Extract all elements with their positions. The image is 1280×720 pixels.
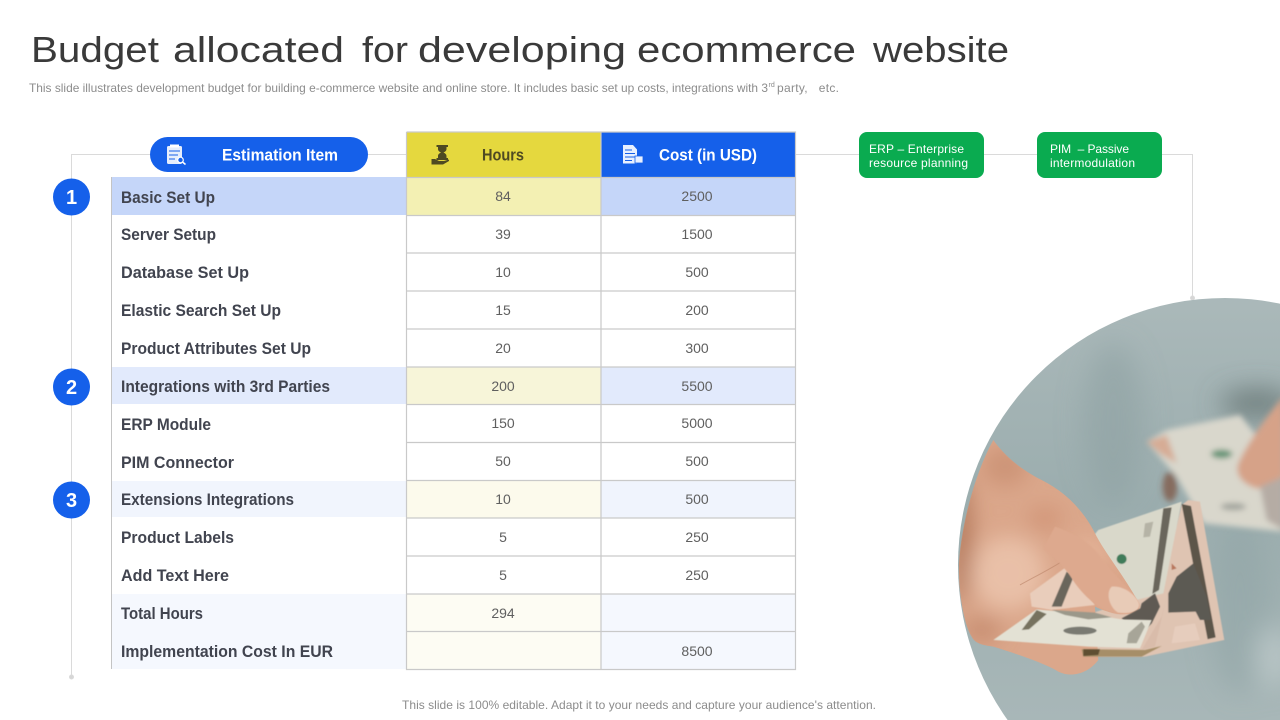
footer note: This slide is 100% editable. Adapt it to your needs and capture your audience's attention. [402, 698, 876, 712]
hours values: 15 [495, 302, 511, 318]
cost values: 250 [685, 567, 709, 583]
title: website [872, 29, 1009, 70]
title [31, 29, 1009, 70]
cost values [681, 188, 713, 659]
hours values: 294 [491, 605, 515, 621]
callout: PIM: intermodulation [1050, 156, 1135, 170]
title: Budget [31, 29, 159, 70]
header: cost [623, 145, 757, 164]
cost values: 500 [685, 264, 709, 280]
hours values: 39 [495, 226, 511, 242]
front bill [993, 609, 1162, 657]
hours values: 200 [491, 378, 515, 394]
thumb overlay [1043, 527, 1140, 614]
cost values: 2500 [681, 188, 713, 204]
callout: ERP: ERP – Enterprise [869, 142, 964, 156]
near hand and bills [958, 440, 1225, 674]
title: developing [418, 29, 626, 70]
engraved portion beside thumb [1122, 593, 1160, 628]
cost values: 5000 [681, 415, 713, 431]
hand silhouette [958, 440, 1136, 674]
cost column: fills [601, 132, 795, 669]
back bills [1095, 500, 1225, 657]
estimation item column: row bands [112, 177, 406, 669]
hours values: 10 [495, 491, 511, 507]
row labels: Implementation Cost In EUR [121, 642, 333, 661]
title: ecommerce [637, 29, 856, 70]
hours values: 84 [495, 188, 511, 204]
blurred shirt and far hand [1083, 343, 1280, 693]
hours values: 10 [495, 264, 511, 280]
header pill: estimation item: Estimation Item [222, 146, 338, 164]
row labels: Integrations with 3rd Parties [121, 377, 330, 396]
callout: ERP: resource planning [869, 156, 968, 170]
table [112, 132, 796, 670]
row labels: Add Text Here [121, 566, 229, 585]
subtitle: party, etc. [777, 81, 839, 95]
cost values: 300 [685, 340, 709, 356]
cost values: 500 [685, 491, 709, 507]
hours column: fills [406, 132, 601, 669]
cost values: 1500 [681, 226, 713, 242]
cost values: 5500 [681, 378, 713, 394]
photo: hands holding dollar bills [950, 290, 1280, 720]
badge 2: 2 [66, 377, 77, 399]
cost values: 500 [685, 453, 709, 469]
row labels: Product Labels [121, 528, 234, 547]
row labels: Basic Set Up [121, 188, 215, 207]
hours values [491, 188, 515, 621]
cost values: 8500 [681, 643, 713, 659]
title: for [362, 29, 408, 70]
icon: hourglass on hand [432, 145, 449, 164]
hours values: 20 [495, 340, 511, 356]
header pill: estimation item [150, 137, 368, 172]
callout: PIM [1037, 132, 1162, 178]
hours values: 5 [499, 567, 507, 583]
icon: document with money [623, 145, 643, 164]
badge 3 [53, 482, 90, 518]
header: hours [432, 145, 524, 164]
row labels: Elastic Search Set Up [121, 301, 281, 320]
connector frame [70, 154, 1194, 679]
header: hours: Hours [482, 146, 524, 164]
badge 2 [53, 368, 90, 406]
cost values: 200 [685, 302, 709, 318]
cost values: 250 [685, 529, 709, 545]
callout: PIM: PIM – Passive [1050, 142, 1129, 156]
badge 3: 3 [66, 490, 77, 512]
callout: ERP [859, 132, 984, 178]
row labels: Server Setup [121, 225, 216, 244]
row labels: ERP Module [121, 415, 211, 434]
subtitle: This slide illustrates development budget for building e-commerce website and online store. It includes basic set up costs, integrations with 3 [29, 81, 768, 95]
subtitle: rd [768, 82, 775, 89]
row labels: Product Attributes Set Up [121, 339, 311, 358]
row labels [121, 188, 333, 661]
row labels: PIM Connector [121, 453, 234, 472]
icon: clipboard with magnifier [167, 144, 186, 164]
row labels: Total Hours [121, 604, 203, 623]
hours values: 50 [495, 453, 511, 469]
row labels: Database Set Up [121, 263, 249, 282]
row labels: Extensions Integrations [121, 490, 294, 509]
title: allocated [173, 29, 344, 70]
badge 1 [53, 178, 90, 216]
hours values: 5 [499, 529, 507, 545]
badge 1: 1 [66, 187, 77, 209]
hours values: 150 [491, 415, 515, 431]
header: cost: Cost (in USD) [659, 146, 757, 164]
bill under the finger [1030, 567, 1095, 610]
